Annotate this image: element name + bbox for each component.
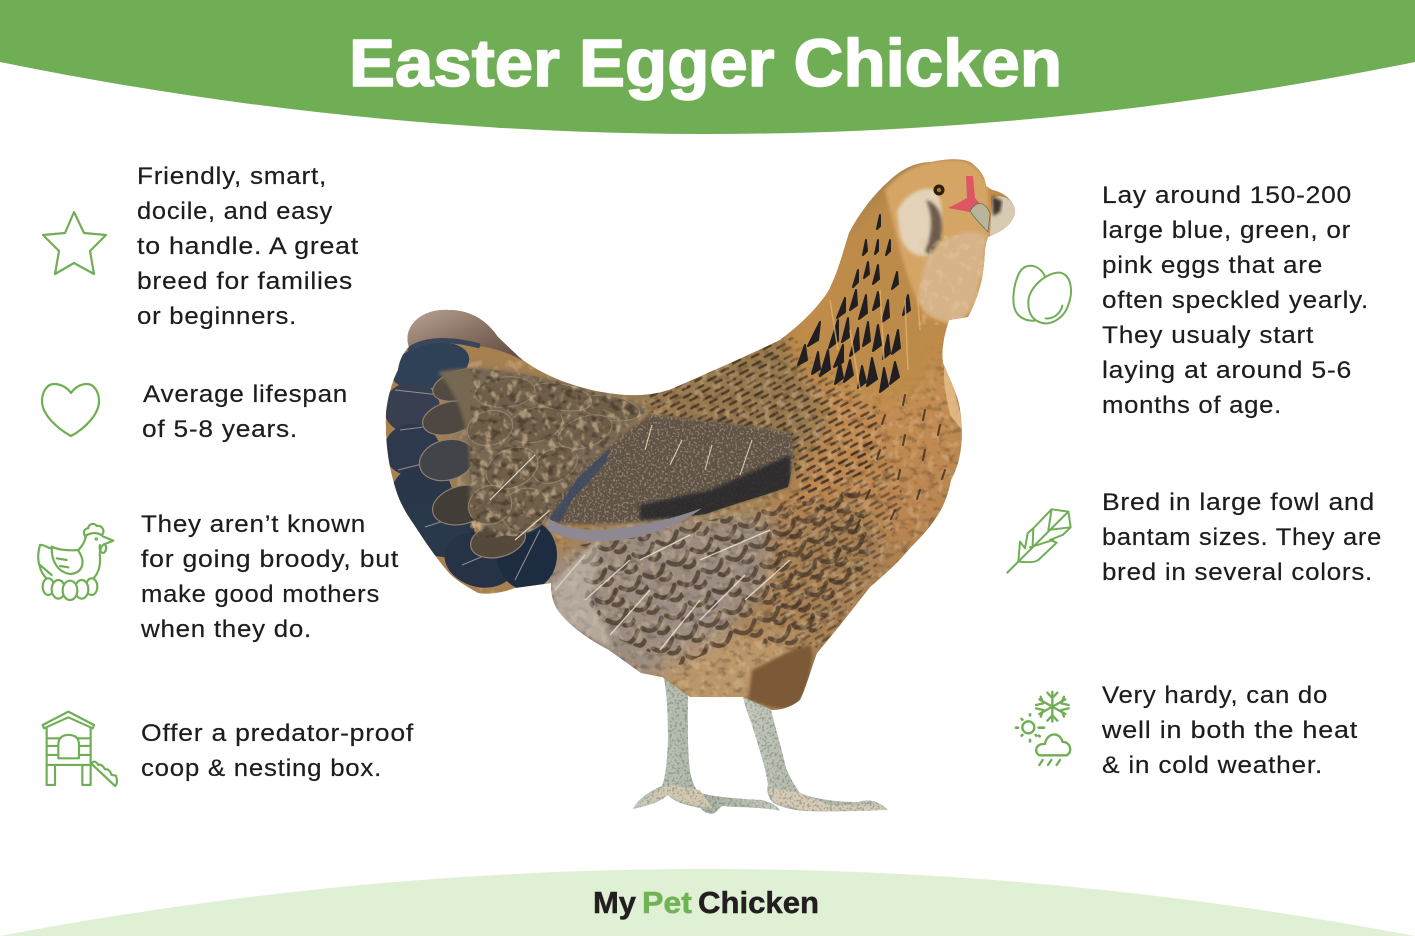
logo: My Pet Chicken: My — [593, 885, 637, 920]
text: sizes and colours — [1102, 489, 1382, 586]
logo: My Pet Chicken: Chicken — [698, 885, 819, 920]
text: temperament: docile, and easy — [137, 198, 333, 225]
text: egg laying: laying at around 5-6 — [1102, 357, 1352, 384]
text: lifespan: Average lifespan — [143, 381, 348, 408]
logo: My Pet Chicken — [593, 885, 819, 920]
text: temperament: Friendly, smart, — [137, 163, 327, 190]
text: hardiness: Very hardy, can do — [1102, 682, 1328, 709]
text: temperament: breed for families — [137, 268, 353, 295]
title: Easter Egger Chicken — [349, 26, 1062, 101]
body of the hen — [380, 150, 1020, 720]
pale belly wisps — [555, 530, 790, 650]
footer banner — [0, 869, 1415, 936]
text: broodiness: They aren’t known — [141, 511, 366, 538]
text: sizes and colours: bantam sizes. They are — [1102, 524, 1382, 551]
text: housing — [141, 720, 414, 782]
icon: feather — [1007, 509, 1071, 573]
text: egg laying: Lay around 150-200 — [1102, 182, 1352, 209]
chicken photo illustration — [380, 150, 1020, 815]
text: hardiness: well in both the heat — [1101, 717, 1358, 744]
icon: heart — [42, 384, 99, 436]
left column of facts — [38, 163, 414, 786]
text: egg laying: large blue, green, or — [1102, 217, 1351, 244]
text: egg laying: months of age. — [1102, 392, 1282, 419]
text: hardiness: & in cold weather. — [1102, 752, 1323, 779]
chest flecks — [856, 395, 945, 529]
text: temperament: to handle. A great — [137, 233, 359, 260]
text: egg laying — [1102, 182, 1369, 419]
header banner — [0, 0, 1415, 134]
fine feather texture — [540, 340, 980, 710]
text: broodiness: when they do. — [140, 616, 312, 643]
text: egg laying: They usualy start — [1102, 322, 1314, 349]
text: housing: coop & nesting box. — [141, 755, 382, 782]
text: broodiness: for going broody, but — [141, 546, 399, 573]
golden neck hackle — [785, 180, 965, 405]
feather fleck patterns — [640, 335, 880, 500]
text: temperament: or beginners. — [137, 303, 297, 330]
soft colour regions — [450, 150, 1020, 710]
dark under-belly patch — [748, 645, 812, 708]
icon: star — [43, 212, 106, 274]
right chest highlight — [944, 360, 962, 430]
text: hardiness — [1101, 682, 1358, 779]
text: lifespan: of 5-8 years. — [142, 416, 298, 443]
tail feathers — [384, 300, 557, 595]
text: egg laying: often speckled yearly. — [1102, 287, 1369, 314]
text: lifespan — [142, 381, 348, 443]
wing — [545, 410, 800, 530]
saddle feathers — [418, 367, 650, 559]
leg scale texture — [630, 675, 890, 815]
icon: weather — [1016, 692, 1070, 765]
icon: chicken coop — [43, 712, 117, 786]
text: broodiness — [140, 511, 399, 643]
text: egg laying: pink eggs that are — [1102, 252, 1323, 279]
right leg — [743, 697, 888, 811]
logo: My Pet Chicken: Pet — [642, 885, 692, 920]
text: temperament — [137, 163, 359, 330]
text: sizes and colours: Bred in large fowl and — [1102, 489, 1375, 516]
text: broodiness: make good mothers — [141, 581, 380, 608]
text: housing: Offer a predator-proof — [141, 720, 414, 747]
right column of facts — [1007, 182, 1382, 779]
icon: brooding hen on eggs — [38, 524, 113, 600]
text: sizes and colours: bred in several colors. — [1102, 559, 1373, 586]
grey primary wing feather — [548, 508, 702, 541]
left leg — [633, 678, 780, 814]
icon: eggs — [1013, 266, 1071, 323]
head — [885, 160, 1015, 325]
